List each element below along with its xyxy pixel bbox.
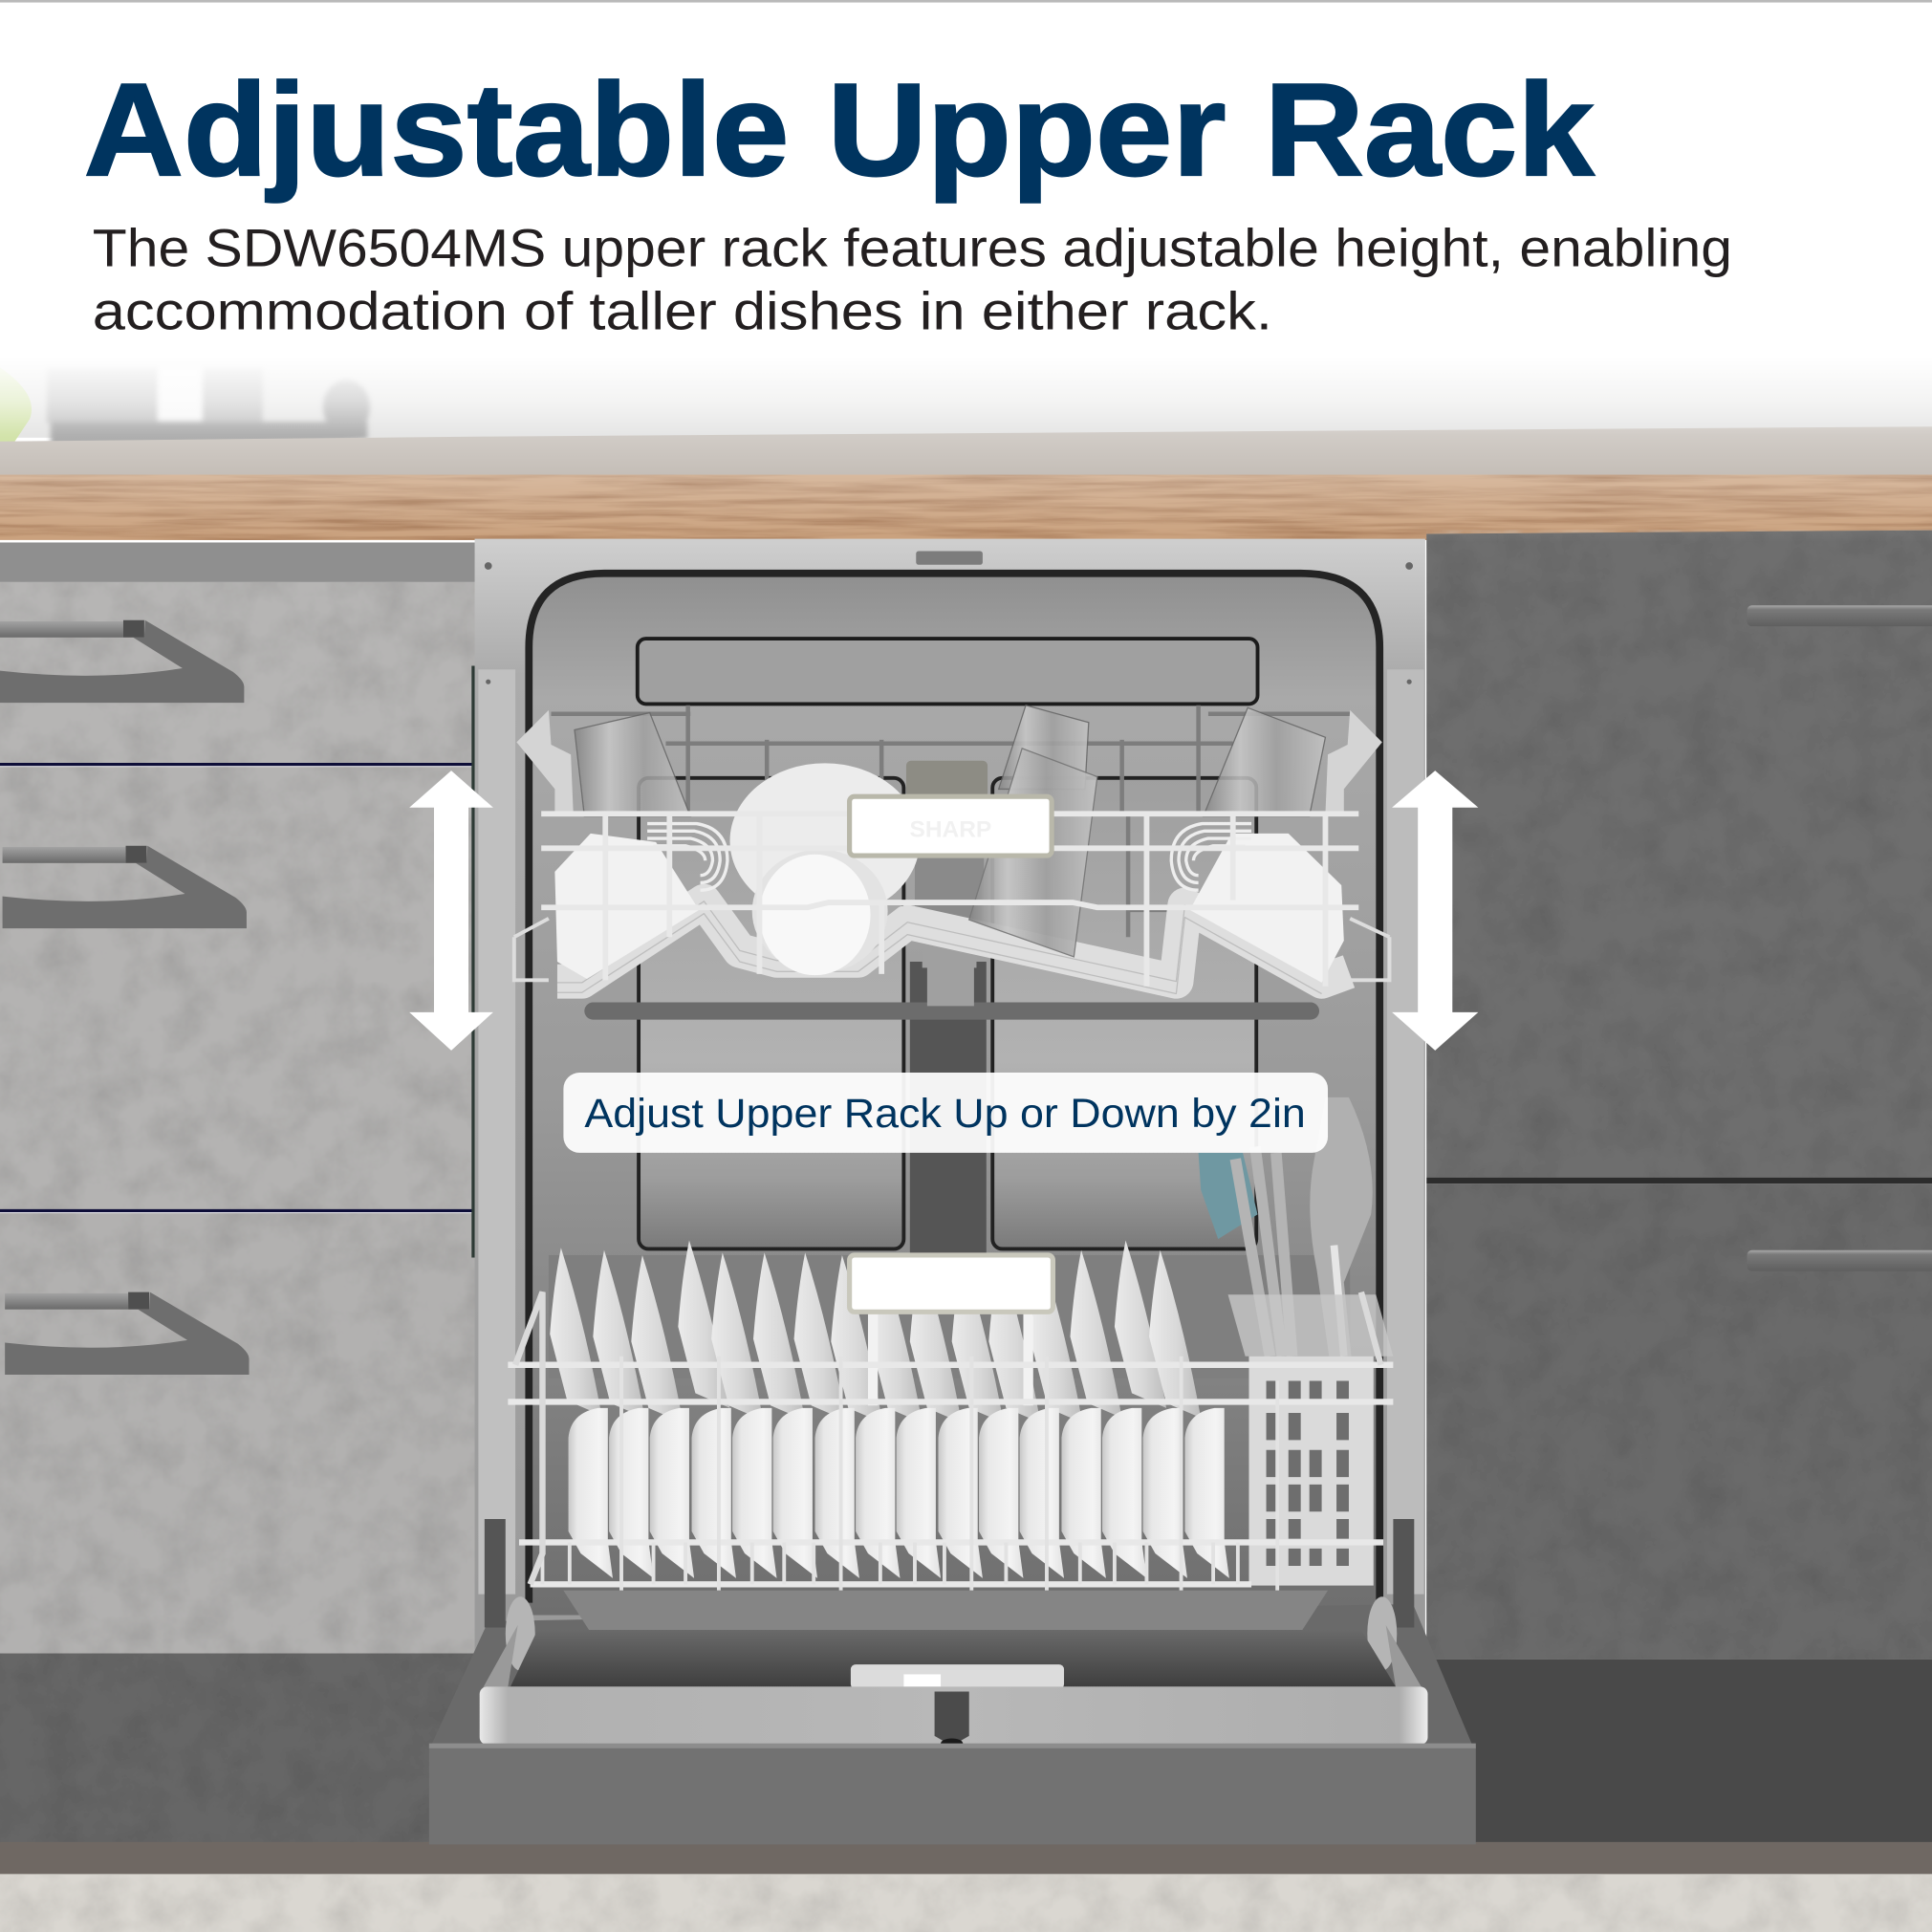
right plinth: [1426, 1660, 1932, 1846]
door panel: [429, 1747, 1476, 1844]
kettle knob: [323, 380, 370, 434]
teal spatula: [1199, 1153, 1258, 1239]
faint brand mark: SHARP: [909, 817, 991, 843]
countertop surface: [0, 426, 1932, 476]
right side clips: [1325, 710, 1382, 814]
left drawer gap lines: [0, 765, 475, 1211]
lower rack wires: [508, 1365, 1393, 1584]
large plates center: [730, 763, 920, 919]
door bed: [431, 1604, 1472, 1745]
left side clips: [516, 710, 574, 814]
back panel left upper: [639, 778, 903, 1248]
door gasket: [529, 574, 1379, 1603]
callout: [563, 1073, 1328, 1153]
subtitle: The SDW6504MS upper rack features adjustable height, enabling: [93, 219, 1732, 278]
cabinet edge line: [472, 665, 475, 1258]
cutlery basket: [1228, 1294, 1393, 1586]
callout background: [563, 1073, 1328, 1153]
rug: [0, 1874, 1932, 1932]
spray arm: [584, 1003, 1319, 1020]
small plate front: [759, 855, 871, 975]
dishwasher frame: [475, 539, 1425, 1667]
basket holes: [1267, 1380, 1349, 1566]
tine coils left: [647, 824, 727, 890]
latch foot: [941, 1739, 963, 1748]
lower rack front plates: [569, 1408, 1229, 1578]
left drawer 1: [0, 582, 476, 763]
door hinges right: [1393, 1519, 1414, 1627]
left handle 1: [0, 620, 244, 703]
left handle 3: [5, 1292, 250, 1375]
white bowl right: [1190, 834, 1344, 983]
basket top: [1228, 1294, 1393, 1357]
left handle 2: [3, 846, 247, 928]
inner door: [510, 1630, 1396, 1686]
arrow: left up and down: [409, 771, 493, 1051]
upper rack back wires: [552, 706, 1350, 937]
floor: [0, 1842, 1932, 1876]
lower rack back plates: [550, 1240, 1201, 1422]
small plates center: [752, 850, 888, 973]
kettle base: [51, 422, 367, 451]
subtitle: accommodation of taller dishes in either rack.: [93, 281, 1272, 340]
left drawer 2: [0, 767, 476, 1209]
door panel top edge: [429, 1744, 1476, 1748]
right cabinet lower door: [1426, 1183, 1932, 1660]
side rail left: [478, 669, 515, 1595]
center mount under label: [915, 853, 984, 940]
side rail right: [1387, 669, 1424, 1595]
leaf: [0, 367, 32, 452]
hinge roller right: [1367, 1596, 1397, 1671]
hub: [906, 761, 988, 797]
lower rack label plate: [850, 1255, 1053, 1312]
right cabinet gap: [1426, 1178, 1932, 1183]
white bowl left: [554, 834, 699, 979]
back panel right upper: [992, 778, 1256, 1248]
kettle body: [47, 367, 263, 423]
kitchen wall: [0, 352, 1932, 438]
lower rack side frame: [515, 1292, 1380, 1584]
whisk and utensils: [1235, 1146, 1292, 1357]
door hinges left: [485, 1519, 506, 1627]
top vent: [638, 639, 1258, 704]
back glass: [999, 706, 1089, 789]
door rim sides: [481, 1625, 1424, 1692]
kettle highlight: [158, 367, 203, 421]
right cabinet upper door: [1426, 531, 1932, 1178]
subtitle: [93, 219, 1732, 340]
hinge roller left: [506, 1596, 535, 1671]
right handle 1: [1747, 605, 1932, 626]
top white fade: [0, 336, 1932, 542]
lower rack label stems: [873, 1312, 1029, 1405]
top latch: [916, 552, 983, 565]
lower tub shadow: [563, 1591, 1328, 1633]
door rim: [480, 1686, 1428, 1745]
right glass: [1204, 707, 1325, 816]
basket body: [1248, 1357, 1374, 1586]
slotted spoon: [1310, 1097, 1373, 1357]
right handle 2: [1747, 1250, 1932, 1271]
center column: [910, 962, 987, 1258]
front glass: [969, 749, 1097, 957]
screws: [485, 562, 1413, 684]
kettle on counter: [47, 367, 370, 451]
spray arm mount: [923, 949, 976, 1006]
spoon highlight: [1334, 1246, 1344, 1357]
dispenser cup: [903, 1674, 941, 1686]
upper rack tiered base: [557, 901, 1349, 994]
door latch: [935, 1692, 969, 1746]
callout text: Adjust Upper Rack Up or Down by 2in: [584, 1091, 1306, 1137]
lower rack vertical wires: [542, 1357, 1277, 1591]
upper rack handles: [514, 919, 1390, 980]
top edge line: [0, 0, 1932, 3]
countertop wood front: [0, 475, 1932, 540]
left glass: [575, 712, 690, 816]
upper rack label plate: [850, 796, 1052, 856]
arrow: right up and down: [1392, 771, 1478, 1051]
lower tub back band: [549, 1255, 1350, 1378]
dishwasher: [429, 539, 1476, 1844]
tub interior: [529, 572, 1380, 1616]
upper rack front wires: [541, 814, 1358, 987]
left cabinet upper strip: [0, 542, 476, 584]
left plinth: [0, 1654, 478, 1846]
cutlery: [1199, 1097, 1373, 1357]
detergent dispenser: [851, 1664, 1064, 1689]
left drawer 3: [0, 1213, 478, 1654]
tine coils right: [1171, 824, 1251, 890]
title: Adjustable Upper Rack: [84, 56, 1595, 204]
